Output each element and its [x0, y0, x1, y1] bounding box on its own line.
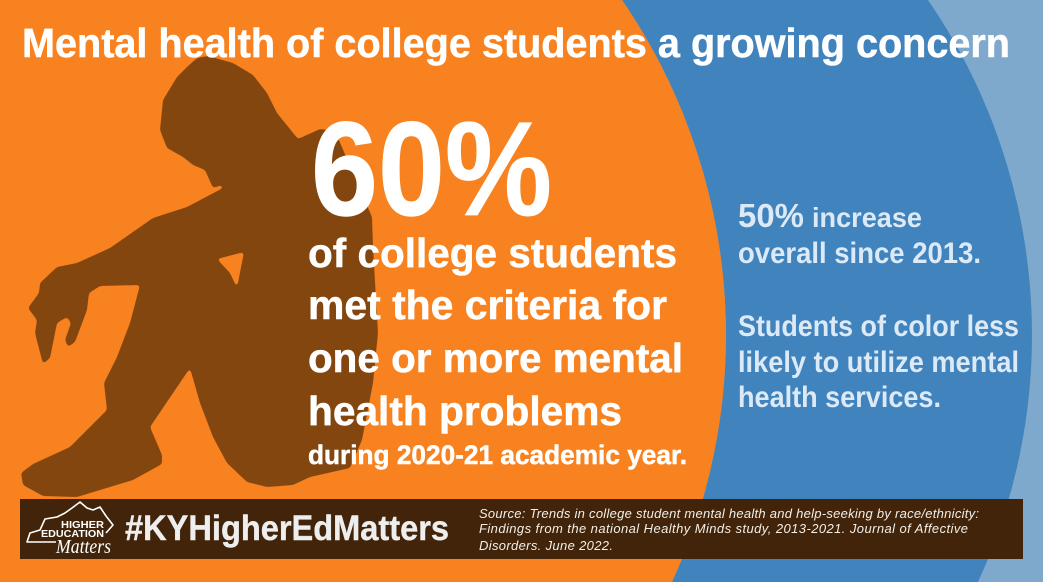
logo: wordmark: HIGHER	[61, 519, 104, 531]
logo: wordmark: EDUCATION	[41, 528, 104, 540]
main statistic description: met the criteria for	[308, 282, 667, 328]
title: Mental health of college students a growing concern	[22, 20, 1010, 66]
background: orange arc panel	[0, 0, 726, 582]
footer bar	[20, 499, 1023, 559]
side fact: 50% increase	[738, 197, 981, 270]
source citation: Disorders. June 2022.	[479, 538, 613, 553]
silhouette: seated student with head down	[21, 56, 378, 497]
logo: wordmark	[41, 519, 111, 558]
side fact: students of color: likely to utilize mental	[738, 346, 1019, 379]
main statistic description	[308, 230, 687, 470]
main statistic description: of college students	[308, 230, 677, 276]
footer background	[20, 499, 1023, 559]
main statistic description: one or more mental	[308, 335, 683, 381]
logo: wordmark: Matters	[55, 536, 111, 558]
logo: Kentucky outline	[27, 502, 113, 542]
logo: Higher Education Matters	[27, 502, 113, 558]
main statistic description: health problems	[308, 388, 622, 434]
source citation: Findings from the national Healthy Minds study, 2013-2021. Journal of Affective	[479, 521, 968, 536]
side fact: students of color: Students of color less	[738, 310, 1019, 343]
source citation: Source: Trends in college student mental health and help-seeking by race/ethnicity:	[479, 506, 979, 521]
source citation	[479, 506, 979, 553]
hashtag: #KYHigherEdMatters	[125, 509, 449, 548]
main statistic description: during 2020-21 academic year.	[308, 440, 687, 470]
side fact: students of color	[738, 310, 1019, 414]
main statistic: 60%: 60%	[311, 95, 552, 244]
background: blue arc panel	[622, 0, 1032, 582]
side fact: 50% increase: 50%	[738, 197, 804, 234]
side fact: 50% increase: increase	[812, 202, 922, 233]
side fact: students of color: health services.	[738, 381, 941, 414]
side fact: 50% increase: overall since 2013.	[738, 237, 981, 270]
